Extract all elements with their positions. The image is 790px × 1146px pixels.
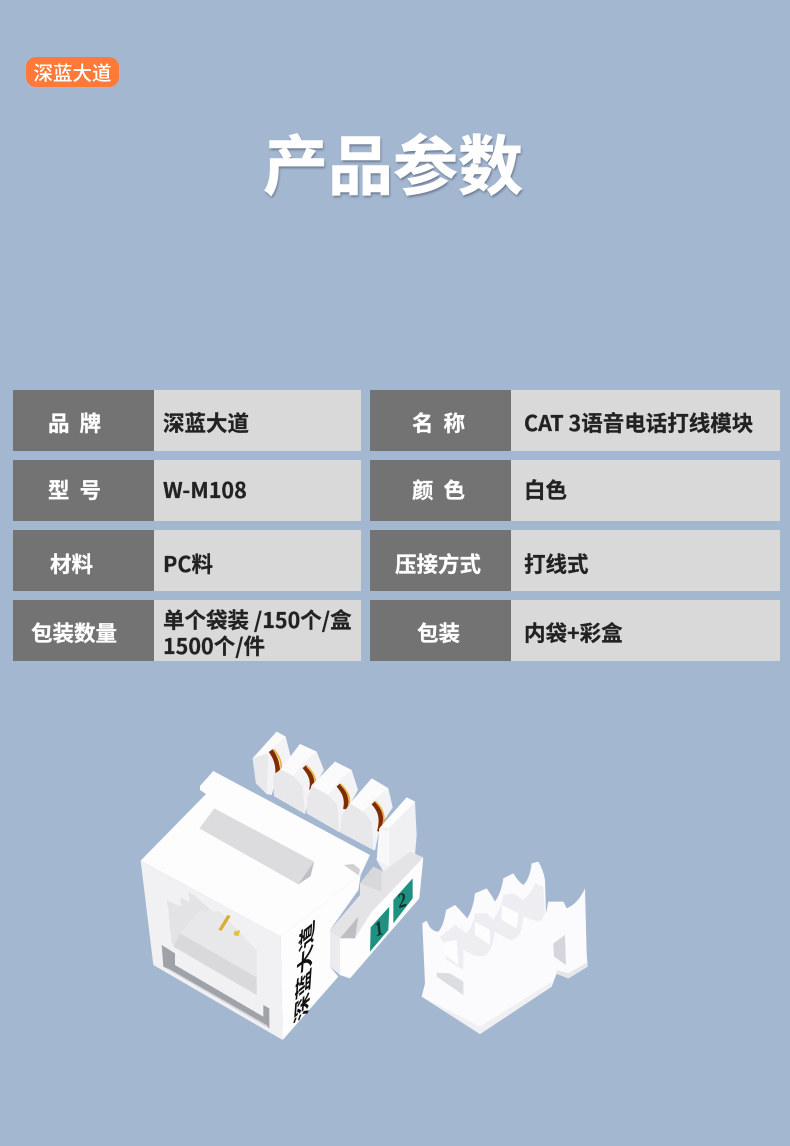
icon: keystone jack module — [141, 732, 423, 1040]
number tag 1: 1 — [374, 917, 384, 942]
row 3 right: crimp type: 压接方式 — [395, 548, 481, 579]
cap interior — [439, 883, 545, 970]
top face — [141, 771, 370, 937]
row 4 left: package quantity: 1500个/件 — [163, 630, 265, 661]
row 4 right: packaging — [370, 600, 780, 661]
cap end notch — [437, 973, 463, 995]
brand print on side: 深蓝大道 — [288, 915, 319, 1030]
brand badge: 深蓝大道 — [33, 57, 112, 86]
row 3 left: material: PC料 — [163, 548, 213, 579]
row 2 left: model — [13, 460, 361, 521]
row 1 left: brand — [13, 390, 361, 451]
cap silhouette — [422, 862, 588, 1034]
row 3 left: material — [13, 530, 361, 591]
row 4 left: package quantity — [13, 600, 361, 661]
row 2 right: colour: 白色 — [524, 474, 567, 505]
number tag 2: 2 — [397, 888, 407, 914]
row 1 left: brand: 品牌 — [48, 407, 111, 438]
terminal blocks — [253, 732, 417, 872]
row 3 right: crimp type — [370, 530, 780, 591]
row 3 left: material: 材料 — [50, 548, 93, 579]
number tag 1 — [370, 907, 389, 952]
row 2 right: colour — [370, 460, 780, 521]
row 3 right: crimp type: 打线式 — [524, 548, 589, 579]
front face with port — [141, 861, 283, 1040]
row 1 right: name — [370, 390, 780, 451]
title: 产品参数 — [263, 114, 523, 208]
row 1 right: name: CAT 3语音电话打线模块 — [524, 407, 753, 438]
icon: wire cap — [422, 862, 588, 1034]
number tag 2 — [393, 878, 413, 923]
cap side gap — [553, 935, 566, 965]
cap inner posts — [445, 905, 518, 965]
parameter table — [13, 390, 780, 661]
row 4 right: packaging: 包装 — [417, 617, 460, 648]
row 4 left: package quantity: 包装数量 — [31, 617, 117, 648]
row 2 left: model: 型号 — [48, 474, 111, 505]
row 4 right: packaging: 内袋+彩盒 — [524, 617, 623, 648]
row 1 left: brand: 深蓝大道 — [163, 407, 249, 438]
connector body side — [281, 852, 423, 1040]
row 1 right: name: 名称 — [412, 407, 475, 438]
row 2 left: model: W-M108 — [163, 474, 247, 505]
row 2 right: colour: 颜色 — [412, 474, 475, 505]
row 4 left: package quantity: 单个袋装 /150个/盒 — [163, 604, 352, 635]
